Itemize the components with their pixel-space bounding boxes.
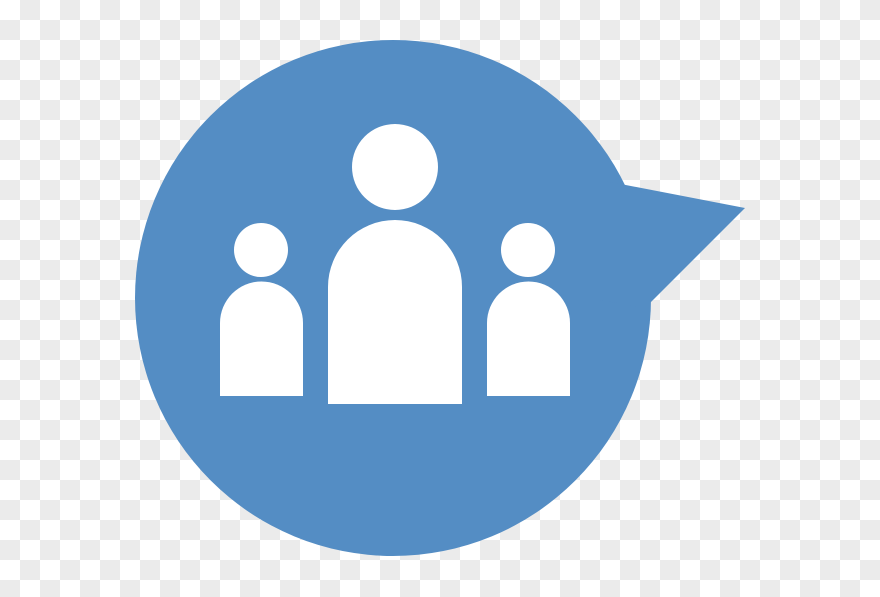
person: right <box>487 223 570 396</box>
person: center <box>328 124 462 404</box>
speech bubble <box>135 40 745 556</box>
person: left <box>220 223 303 396</box>
people group <box>220 124 570 404</box>
